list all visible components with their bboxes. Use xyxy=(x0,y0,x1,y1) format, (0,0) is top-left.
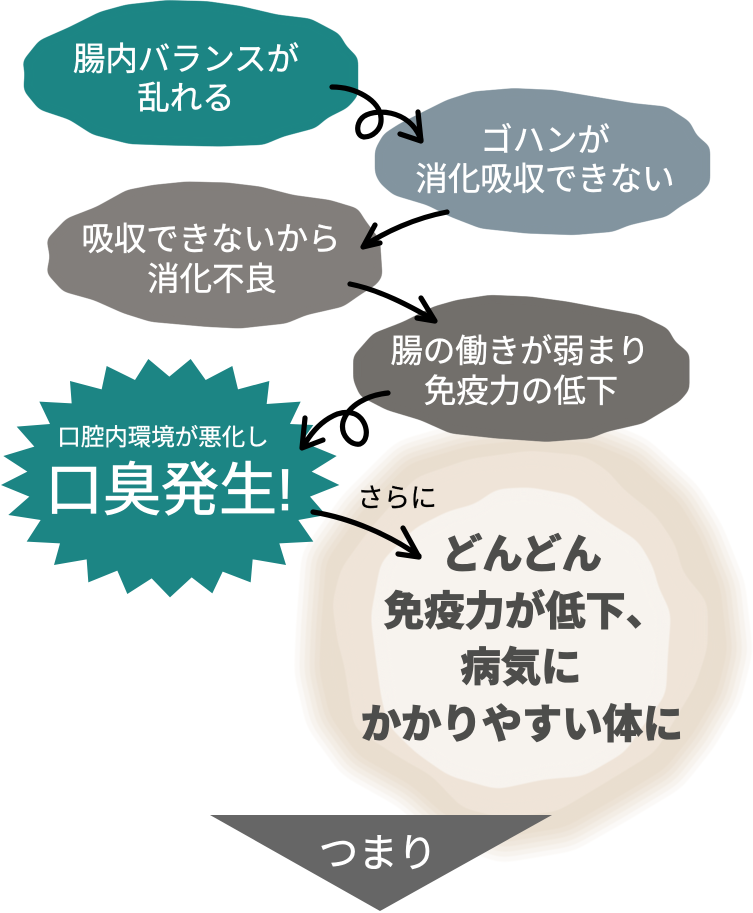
arrow: blue-grey blob to grey blob xyxy=(363,212,447,247)
text: 吸収できないから消化不良 xyxy=(81,221,341,297)
text: 吸収できないから消化不良: 消化不良 xyxy=(147,261,277,297)
arrow: teal blob to blue-grey blob xyxy=(332,87,421,141)
panel: grey blob xyxy=(48,183,381,327)
panel: large beige blob xyxy=(327,447,720,830)
text: main message: 病気に xyxy=(461,645,581,690)
text: 口腔内環境が悪化し: 口腔内環境が悪化し xyxy=(57,424,269,450)
text: main message: 免疫力が低下、 xyxy=(384,589,666,634)
text: ゴハンが消化吸収できない xyxy=(415,122,675,197)
arrow: grey blob to dark grey blob xyxy=(350,284,435,321)
text: 腸内バランスが乱れる xyxy=(73,41,299,116)
downward triangle: つまり xyxy=(210,815,552,911)
text: さらに: さらに xyxy=(357,483,437,513)
text: main message: どんどん xyxy=(442,532,602,577)
text: main message xyxy=(361,532,683,747)
text: 腸の働きが弱まり免疫力の低下 xyxy=(390,333,650,409)
panel: starburst xyxy=(1,359,339,597)
arrow: dark grey blob to starburst xyxy=(302,393,388,448)
text: main message: かかりやすい体に xyxy=(361,702,683,747)
text: 腸の働きが弱まり免疫力の低下: 免疫力の低下 xyxy=(424,373,618,409)
text: つまり: つまり xyxy=(319,832,437,876)
text: 口臭発生!: 口臭発生! xyxy=(45,458,293,523)
text: ゴハンが消化吸収できない: ゴハンが xyxy=(480,122,610,158)
text: 腸内バランスが乱れる: 腸内バランスが xyxy=(73,41,299,77)
text: 腸の働きが弱まり免疫力の低下: 腸の働きが弱まり xyxy=(390,333,650,369)
text: ゴハンが消化吸収できない: 消化吸収できない xyxy=(415,161,675,197)
panel: dark grey blob xyxy=(355,296,688,440)
panel: blue-grey blob xyxy=(376,90,709,234)
text: 腸内バランスが乱れる: 乱れる xyxy=(137,80,235,116)
arrow: starburst to beige blob xyxy=(313,512,419,557)
text: 吸収できないから消化不良: 吸収できないから xyxy=(81,221,341,257)
panel: teal blob cause xyxy=(24,2,357,145)
